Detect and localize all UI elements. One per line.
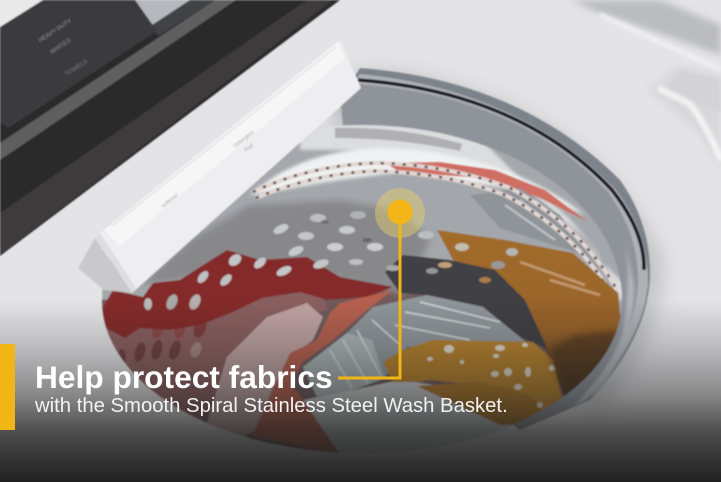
pale pink fabric [207, 303, 323, 440]
yellow accent bar [0, 344, 15, 430]
salmon fabric [252, 290, 393, 455]
detergent dispenser cup [648, 66, 721, 170]
drawer labels: Detergent [233, 130, 256, 150]
drawer labels [161, 130, 256, 210]
marker halo [375, 188, 425, 238]
top right lid strip [570, 0, 721, 70]
control panel display: WHITES [49, 38, 72, 56]
grey white fabric bottom [302, 380, 511, 453]
dispenser drawer [78, 40, 361, 293]
control console [0, 0, 340, 256]
heading: Help protect fabrics [35, 359, 333, 395]
patterned mauve fabric left [108, 292, 328, 419]
mustard fabric right side [437, 230, 622, 400]
drawer labels: Pod [244, 143, 255, 154]
marker dot [388, 200, 412, 224]
control panel display [0, 0, 157, 128]
leader line [338, 212, 400, 378]
dimples [144, 211, 518, 311]
grey striped fabric behind [470, 188, 600, 270]
basket top rim [250, 120, 640, 300]
red fabric reflection [100, 250, 393, 338]
callout: marker on basket with leader line [338, 188, 425, 378]
bottom dark gradient [0, 300, 721, 482]
control panel display: HEAVY DUTY [38, 18, 73, 44]
grey striped fabric [303, 295, 530, 397]
lower laundry shadow base [101, 288, 566, 450]
gasket ring [340, 68, 650, 430]
tub opening shadow [320, 71, 664, 410]
subheading: with the Smooth Spiral Stainless Steel Wash Basket. [34, 395, 508, 417]
steel wall [289, 174, 596, 254]
stainless steel wash basket with laundry [100, 120, 640, 470]
dark reflection center [385, 255, 548, 350]
control panel display: TOWELS [64, 59, 89, 78]
pink fabric strip [385, 162, 588, 222]
steel dimple area [140, 200, 430, 295]
mustard polka dot fabric [383, 340, 567, 425]
basket hole rows [253, 163, 617, 292]
drawer labels: softener [161, 193, 180, 210]
dark tip of mustard reflection [548, 330, 618, 395]
